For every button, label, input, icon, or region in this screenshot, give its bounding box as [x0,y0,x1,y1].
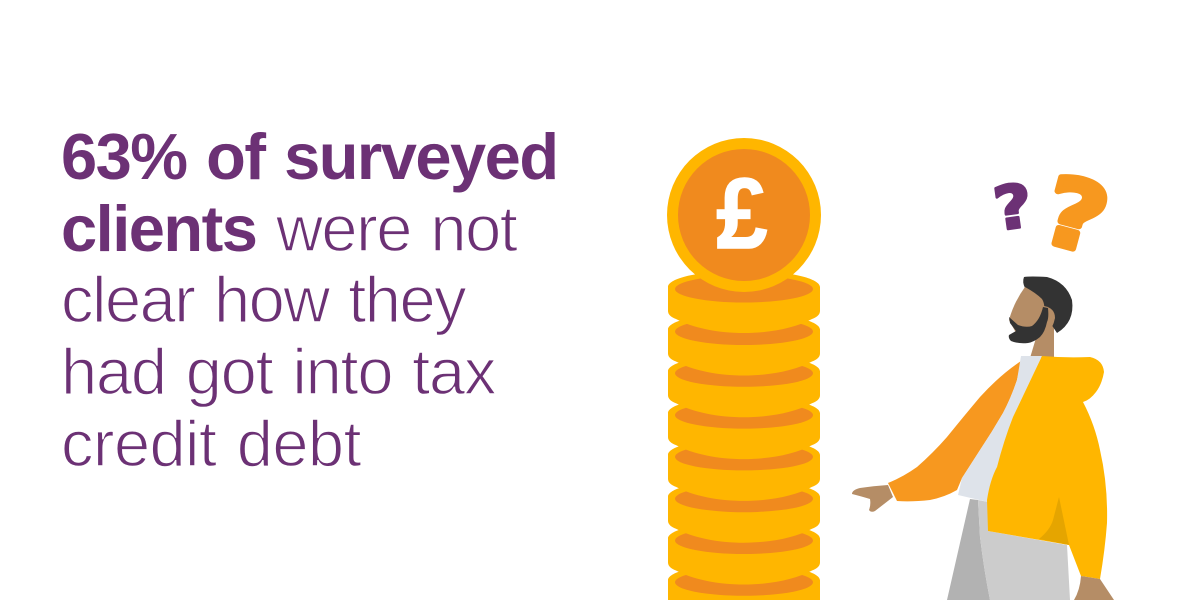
yellow jacket [987,356,1107,579]
headline: 63% of surveyed clients were not clear how they had got into tax credit debt [61,120,558,480]
headline: 63% of surveyed clients were not clear how they had got into tax credit debt: clients were not [61,192,516,265]
neck [1030,318,1054,358]
person [852,276,1114,600]
face [1009,287,1044,338]
beard [1009,307,1048,343]
t-shirt [958,356,1042,502]
left sleeve [888,361,1021,501]
pound coin [667,138,821,292]
jacket fold shadow [1039,497,1069,545]
headline: 63% of surveyed clients were not clear how they had got into tax credit debt: 63% of surveyed [61,120,558,193]
headline: 63% of surveyed clients were not clear how they had got into tax credit debt: clear how they [61,263,465,336]
ear [1043,306,1055,327]
trousers [947,499,1070,600]
left hand [852,485,893,512]
headline: 63% of surveyed clients were not clear how they had got into tax credit debt: credit debt [61,407,361,480]
stack of coins [668,271,820,600]
purple question mark: ? [989,170,1037,245]
right hand [1074,576,1114,600]
hair [1023,276,1072,333]
pound sign: £ [716,158,768,270]
orange question mark: ? [1032,154,1119,277]
headline: 63% of surveyed clients were not clear how they had got into tax credit debt: had got into tax [61,335,495,408]
